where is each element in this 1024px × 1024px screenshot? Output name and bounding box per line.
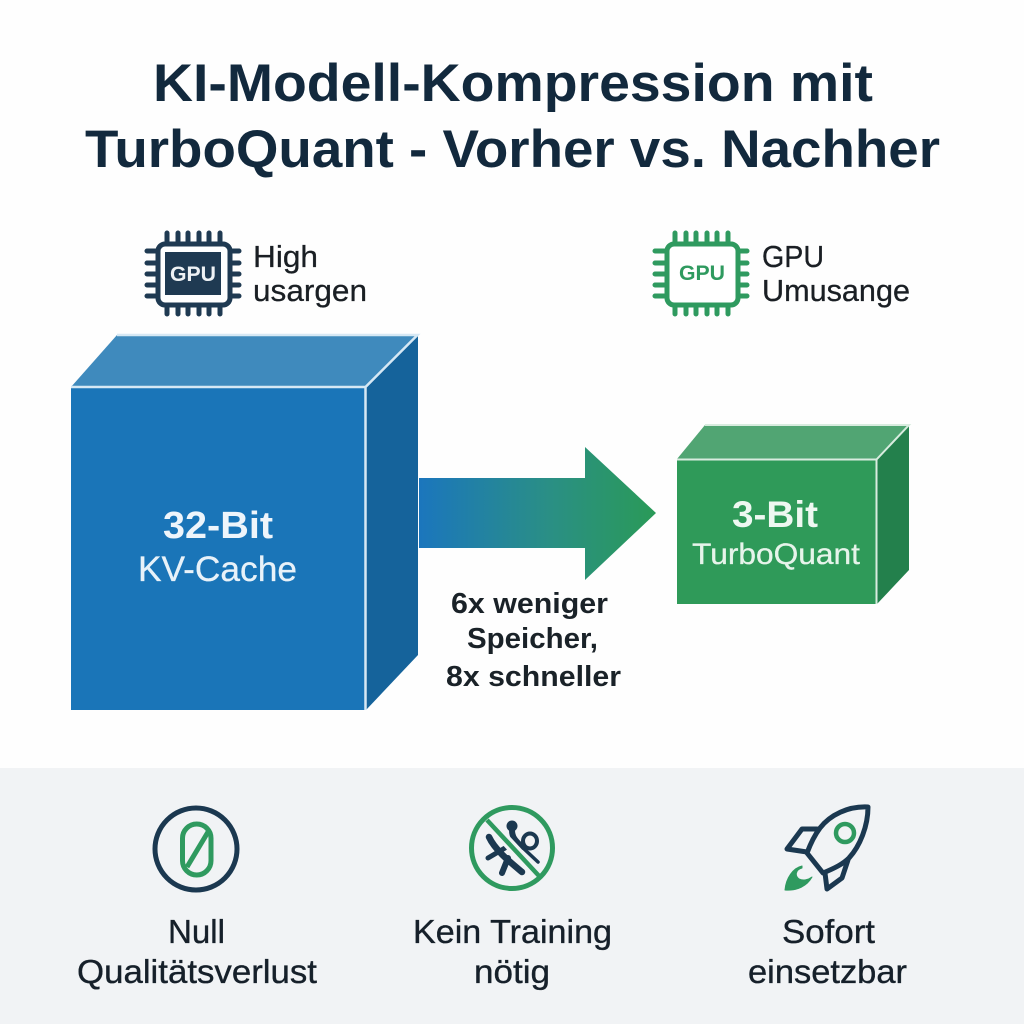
text: kein training noetig — [413, 913, 612, 990]
arrow caption: Speicher, — [467, 623, 598, 655]
label: gpu umusange: Umusange — [762, 273, 910, 308]
text: null qualitaetsverlust: Null — [168, 913, 225, 950]
arrow: compression — [419, 447, 656, 580]
green cube: 3-bit TurboQuant: TurboQuant — [692, 538, 861, 571]
icon: crossed zero — [155, 808, 237, 890]
text: sofort einsetzbar: einsetzbar — [748, 953, 907, 990]
green cube: 3-bit TurboQuant: 3-Bit — [732, 494, 818, 535]
text: sofort einsetzbar: Sofort — [782, 913, 875, 950]
text: sofort einsetzbar — [748, 913, 907, 990]
arrow caption: 6x weniger — [451, 588, 608, 620]
text: null qualitaetsverlust — [77, 913, 317, 990]
label: high usargen: usargen — [253, 273, 367, 308]
label: gpu umusange: GPU — [762, 239, 824, 274]
green cube: 3-bit TurboQuant — [677, 425, 909, 604]
label: high usargen: High — [253, 239, 318, 274]
icon: dark GPU chip: GPU — [170, 263, 216, 286]
icon: green GPU chip: GPU — [679, 262, 725, 285]
icon: dark GPU chip — [147, 233, 239, 314]
text: kein training noetig: Kein Training — [413, 913, 612, 950]
text: kein training noetig: nötig — [474, 953, 550, 990]
label: gpu umusange — [762, 239, 910, 308]
icon: green GPU chip — [655, 233, 747, 314]
blue cube: 32-bit KV-Cache: 32-Bit — [163, 505, 273, 547]
blue cube: 32-bit KV-Cache — [71, 335, 418, 710]
title — [85, 54, 940, 179]
text: null qualitaetsverlust: Qualitätsverlust — [77, 953, 317, 990]
panel: benefits — [0, 768, 1024, 1024]
arrow caption: 8x schneller — [446, 661, 621, 693]
arrow caption — [446, 588, 621, 693]
icon: rocket — [785, 807, 868, 890]
title: KI-Modell-Kompression mit — [153, 54, 873, 113]
title: TurboQuant - Vorher vs. Nachher — [85, 120, 940, 179]
blue cube: 32-bit KV-Cache: KV-Cache — [138, 550, 297, 589]
icon: no training — [472, 808, 552, 888]
label: high usargen — [253, 239, 367, 308]
